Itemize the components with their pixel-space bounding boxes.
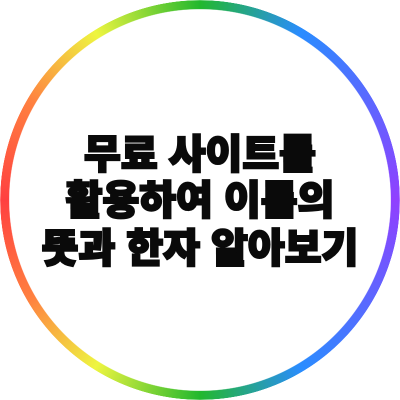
title: 무료 사이트를 [84,133,316,177]
title: 뜻과 한자 알아보기 [42,227,358,271]
title: 활용하여 이름의 [66,179,334,223]
